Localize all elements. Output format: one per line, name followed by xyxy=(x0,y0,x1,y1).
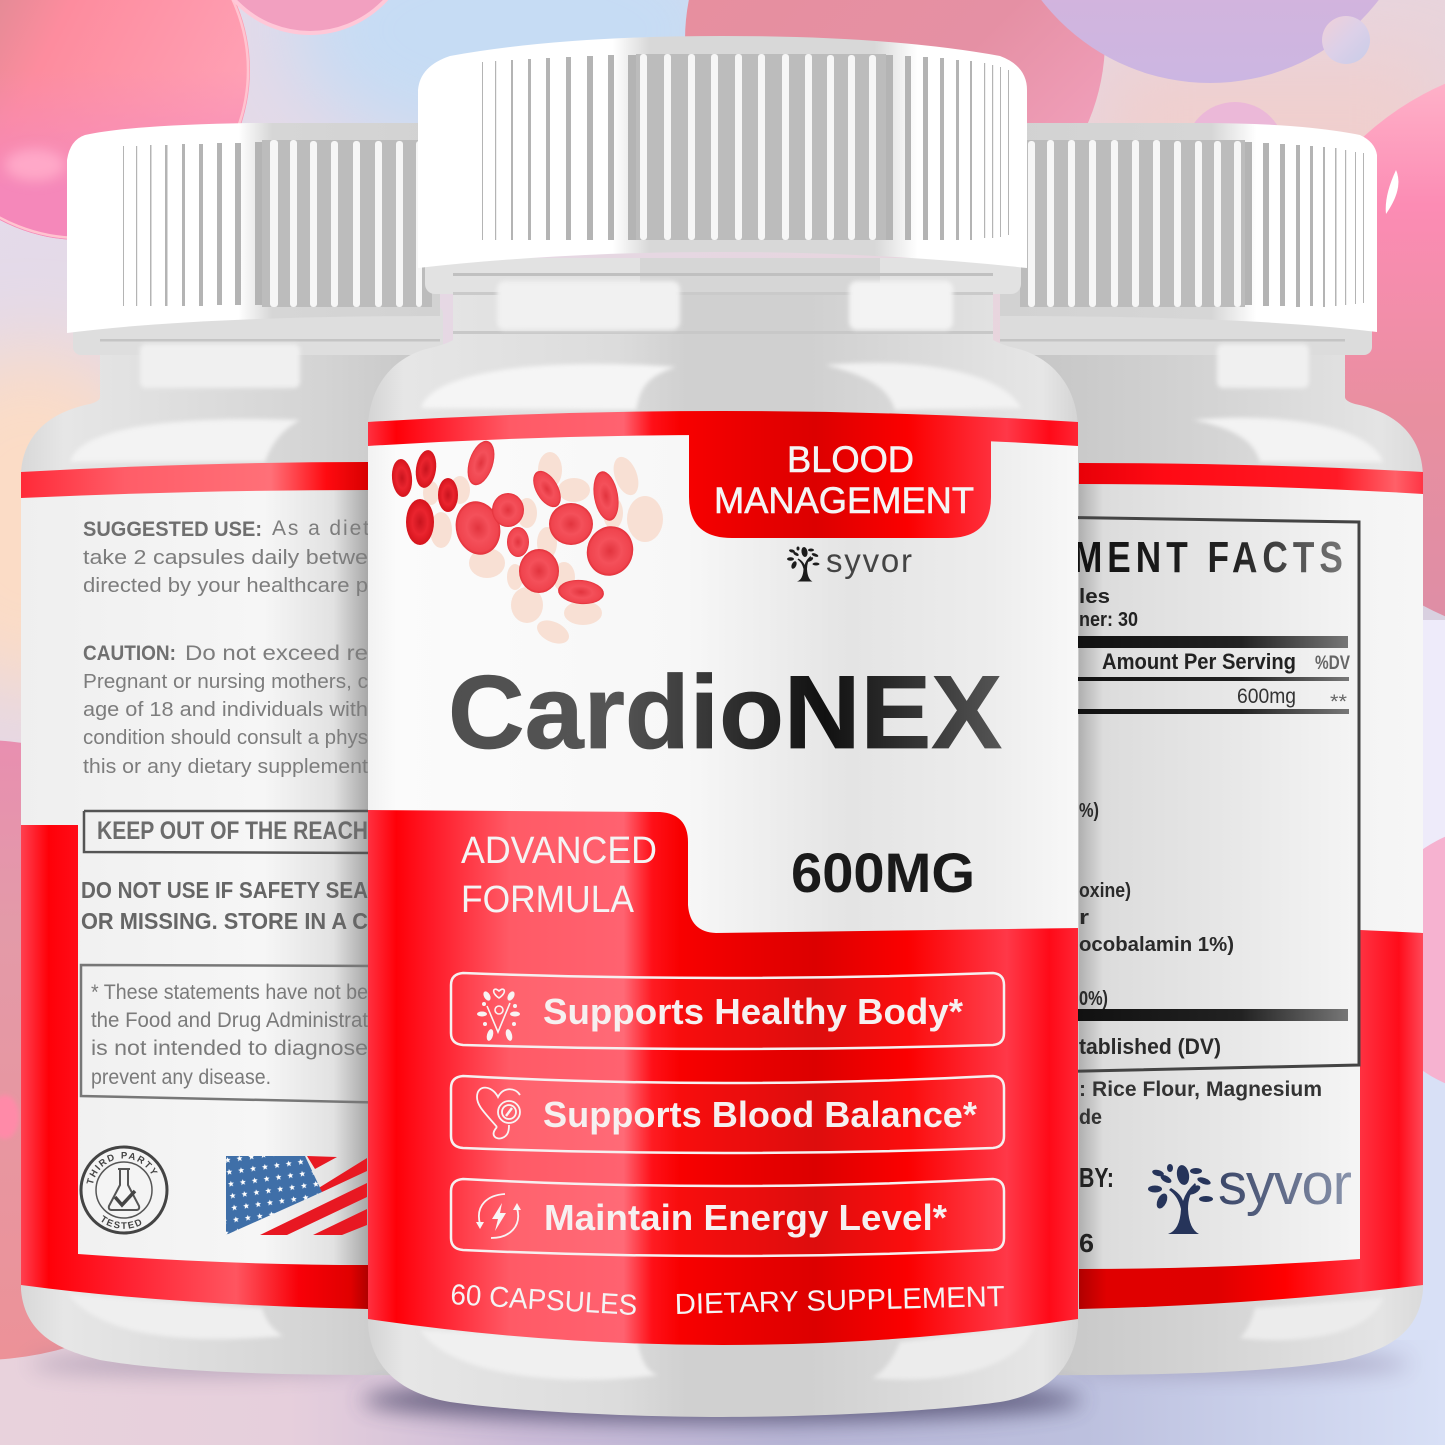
ingredient list: r xyxy=(1079,907,1089,929)
manufactured by text: BY: xyxy=(1079,1162,1114,1193)
caution text: condition should consult a phys xyxy=(83,727,368,749)
dietary supplement label: DIETARY SUPPLEMENT xyxy=(674,1281,1005,1321)
ingredient list: ocobalamin 1%) xyxy=(1079,934,1234,956)
capsule count: 60 CAPSULES xyxy=(450,1279,638,1322)
benefit pill: supports blood balance xyxy=(451,1076,1004,1153)
safety seal text: OR MISSING. STORE IN A C xyxy=(81,908,368,934)
left bottle (back panel) xyxy=(21,123,440,1375)
ingredient list xyxy=(1079,800,1234,1059)
suggested use text: As a diet xyxy=(272,517,369,540)
manufactured by text xyxy=(1079,1162,1114,1258)
disclaimer box: * These statements have not be xyxy=(91,981,368,1004)
red label section xyxy=(1079,930,1423,1309)
caution text: CAUTION: xyxy=(83,642,176,665)
icon: blood cells xyxy=(390,437,663,648)
benefit pill: supports blood balance: Supports Blood Balance* xyxy=(543,1094,977,1135)
icon: syvor tree xyxy=(1148,1164,1213,1234)
label background xyxy=(1079,484,1423,1272)
caution text xyxy=(83,642,368,778)
caution text: age of 18 and individuals with xyxy=(83,699,368,721)
bottle body xyxy=(21,345,450,1375)
neck ring and highlights xyxy=(420,258,1035,1380)
syvor logotype: syvor xyxy=(1218,1152,1352,1217)
disclaimer box: is not intended to diagnose xyxy=(91,1037,368,1060)
suggested use text: take 2 capsules daily betwe xyxy=(83,547,368,569)
cap xyxy=(418,36,1027,268)
third party tested badge xyxy=(80,1146,168,1234)
caution text: Pregnant or nursing mothers, c xyxy=(83,671,368,693)
american flag xyxy=(226,1156,367,1235)
caution text: this or any dietary supplement xyxy=(83,756,368,778)
facts table header and values: %DV xyxy=(1315,653,1350,674)
red label section xyxy=(21,825,368,1309)
red top band xyxy=(1079,463,1423,494)
label background xyxy=(21,487,368,1270)
other ingredients xyxy=(1079,1078,1322,1129)
supplement facts box xyxy=(1040,517,1359,1072)
disclaimer box: prevent any disease. xyxy=(91,1066,271,1089)
benefit pill: maintain energy level: Maintain Energy Level* xyxy=(544,1197,947,1238)
red top band xyxy=(368,411,1078,446)
advanced formula: FORMULA xyxy=(461,879,635,921)
benefit pill: supports healthy body: Supports Healthy Body* xyxy=(543,991,963,1032)
label background xyxy=(368,425,1078,940)
third party tested badge: THIRD PARTY xyxy=(86,1152,158,1184)
icon: healthy body xyxy=(477,989,520,1042)
red tab: blood management xyxy=(689,430,991,538)
caution text: Do not exceed re xyxy=(185,642,368,665)
bottle body xyxy=(368,285,1078,1417)
facts table header and values xyxy=(1102,649,1350,713)
manufactured by text: 6 xyxy=(1079,1228,1094,1258)
safety seal text xyxy=(81,877,368,934)
dosage: 600MG xyxy=(791,841,975,904)
cap xyxy=(1000,123,1377,332)
suggested use text xyxy=(83,517,369,597)
red tab: blood management: BLOOD xyxy=(787,439,914,480)
icon: blood pressure heart xyxy=(477,1088,520,1139)
facts table header and values: ** xyxy=(1330,692,1348,713)
other ingredients: : Rice Flour, Magnesium xyxy=(1079,1078,1322,1101)
serving information: les xyxy=(1079,586,1110,608)
other ingredients: de xyxy=(1079,1106,1102,1129)
suggested use text: SUGGESTED USE: xyxy=(83,518,262,541)
supplement facts heading: MENT FACTS xyxy=(1073,533,1348,582)
right bottle (supplement facts panel) xyxy=(1000,123,1423,1375)
benefit pill: supports healthy body xyxy=(451,973,1004,1049)
ingredient list: %) xyxy=(1079,800,1099,822)
red top band xyxy=(21,462,368,498)
neck ring and highlights xyxy=(1000,306,1383,1340)
disclaimer box xyxy=(81,965,400,1103)
facts table header and values: 600mg xyxy=(1237,685,1296,708)
product name: CardioNEX xyxy=(448,655,1002,771)
safety seal text: DO NOT USE IF SAFETY SEA xyxy=(81,877,368,903)
ingredient list: oxine) xyxy=(1079,880,1131,902)
disclaimer box: the Food and Drug Administrat xyxy=(91,1009,368,1032)
center bottle (front) xyxy=(368,36,1078,1417)
bottle body xyxy=(1000,345,1423,1375)
keep out of reach box: KEEP OUT OF THE REACH xyxy=(97,817,368,845)
side bottle shadows xyxy=(30,1353,1410,1375)
center bottle shadow xyxy=(362,1378,1082,1422)
third party tested badge: TESTED xyxy=(102,1215,142,1229)
serving information: ner: 30 xyxy=(1079,609,1138,631)
icon: syvor tree xyxy=(787,546,820,582)
red tab: blood management: MANAGEMENT xyxy=(714,480,974,521)
facts table rules xyxy=(1040,636,1349,1021)
ingredient list: 0%) xyxy=(1079,988,1108,1010)
serving information xyxy=(1079,586,1138,631)
neck ring and highlights xyxy=(68,306,443,1339)
facts table header and values: Amount Per Serving xyxy=(1102,649,1296,674)
benefit pill: maintain energy level xyxy=(451,1179,1004,1256)
icon: energy arrows xyxy=(476,1194,521,1238)
red bottom section xyxy=(368,810,1078,1345)
cap xyxy=(67,123,440,333)
suggested use text: directed by your healthcare p xyxy=(83,575,368,597)
advanced formula xyxy=(461,830,657,921)
keep out of reach box xyxy=(84,811,400,853)
advanced formula: ADVANCED xyxy=(461,830,657,872)
ingredient list: tablished (DV) xyxy=(1079,1034,1221,1059)
syvor small logotype: syvor xyxy=(826,542,912,579)
